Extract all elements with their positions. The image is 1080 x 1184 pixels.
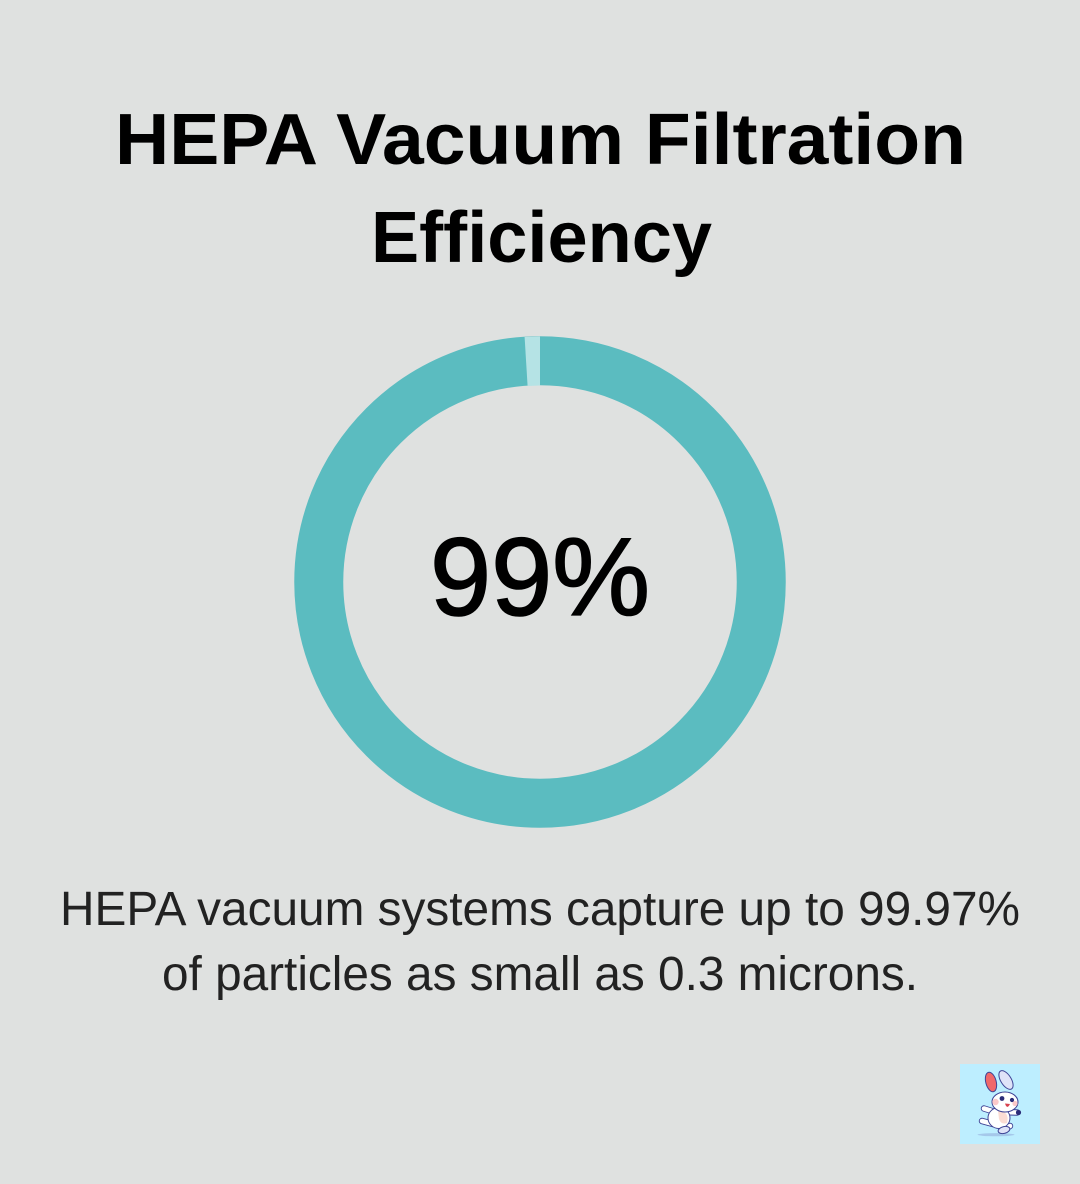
title: Efficiency xyxy=(371,198,712,278)
remaining 1% segment xyxy=(525,336,540,386)
title: HEPA Vacuum Filtration xyxy=(115,100,966,180)
description text: of particles as small as 0.3 microns. xyxy=(162,948,918,1001)
donut chart: 99% xyxy=(319,336,761,803)
description text: HEPA vacuum systems capture up to 99.97% xyxy=(60,883,1020,936)
icon: running bunny logo xyxy=(960,1064,1040,1144)
title xyxy=(115,100,966,278)
big number: 99%: 99% xyxy=(430,516,650,639)
description text xyxy=(60,883,1020,1001)
